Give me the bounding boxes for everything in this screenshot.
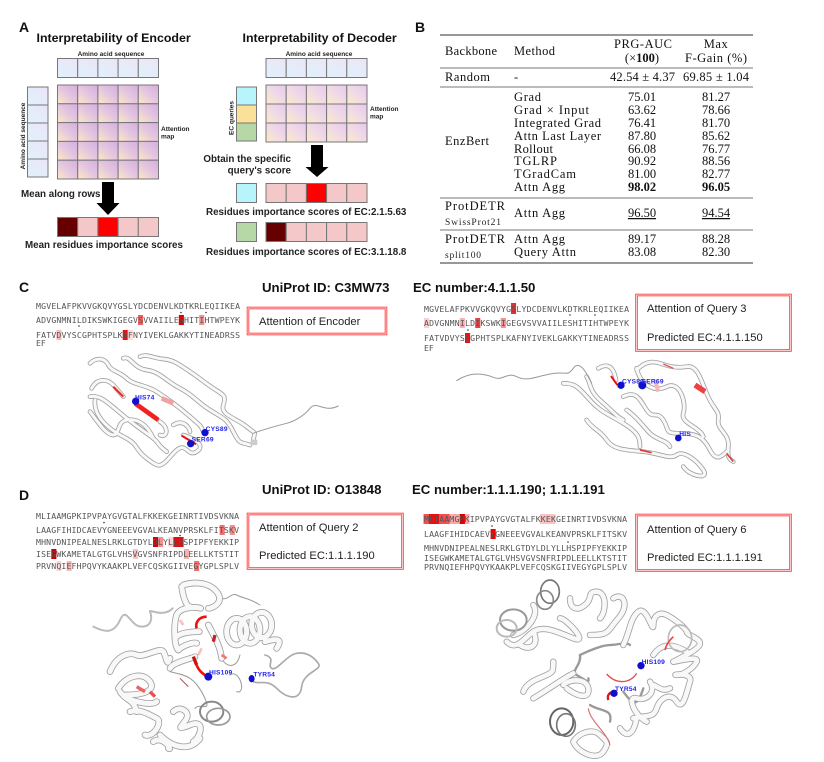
query swatch 2 (236, 222, 256, 242)
rows: EnzBert: TGradCam (514, 167, 576, 181)
protein structure: query 2 view: TYR54 (253, 672, 275, 679)
sequence: query 3 attention: ADVGNMNILDIKSWKIGEGVSVVAIILESHITIHTWPEYK (424, 318, 629, 328)
callout: attention of query 6: Predicted EC:1.1.1.191 (647, 552, 763, 564)
panel C: case study C3MW73 (19, 279, 790, 476)
callout: attention of query 2: Attention of Query 2 (259, 522, 359, 534)
protein structure: query 3 view (457, 362, 733, 476)
encoder sequence column (28, 87, 48, 177)
row: Random: 42.54 ± 4.37 (610, 70, 675, 84)
label: obtain specific query score: Obtain the specific (203, 154, 291, 165)
callout: attention of query 2 (248, 514, 402, 568)
encoder label: amino acid sequence top: Amino acid sequence (78, 51, 145, 58)
decoder label: EC queries: EC queries (228, 101, 236, 135)
row: ProtDETR SwissProt21: 96.50 (628, 206, 656, 220)
callout: attention of query 6 (636, 515, 790, 570)
sequence: encoder attention: FATVDVYSCGPHTSPLKAFNYIVEKLGAKKYTINEADRSS (36, 330, 240, 340)
panel A: interpretability diagrams (19, 19, 407, 258)
row: ProtDETR SwissProt21: Attn Agg (514, 206, 566, 220)
table header: (×100) (625, 51, 659, 65)
panel letter A: A (19, 19, 29, 35)
rows: EnzBert: EnzBert (445, 134, 490, 148)
rows: EnzBert: 66.08 (628, 142, 656, 156)
caption: mean residues importance: Mean residues importance scores (25, 240, 183, 251)
sequence: encoder attention: ADVGNMNILDIKSWKIGEGVSVVAIILESHITIHTWPEYK (36, 315, 240, 325)
rows: EnzBert: 78.66 (702, 103, 730, 117)
rows: EnzBert: 75.01 (628, 90, 656, 104)
decoder label: attention map: Attention (370, 106, 399, 113)
protein structure: query 3 view: SER69 (642, 378, 664, 385)
query swatch 1 (236, 184, 256, 202)
panel D: case study O13848 (19, 482, 790, 756)
decoder importance row EC 3.1.18.8 (266, 222, 367, 242)
caption: EC 3.1.18.8: Residues importance scores of EC:3.1.18.8 (206, 247, 407, 258)
protein structure: query 2 view: HIS109 (209, 669, 232, 676)
rows: EnzBert: Rollout (514, 142, 554, 156)
sequence: encoder attention: MGVELAFPKVVGKQVYGSLYDCDENVLKDTKRLEQIIKEA (36, 301, 240, 311)
protein structure: query 6 view: TYR54 (615, 686, 637, 693)
rows: EnzBert: TGLRP (514, 154, 557, 168)
rows: EnzBert: 81.27 (702, 90, 730, 104)
encoder label: attention map: Attention (161, 126, 190, 133)
protein structure: encoder view (90, 356, 338, 465)
rows: ProtDETR split100 (445, 232, 730, 261)
row: ProtDETR SwissProt21: ProtDETR (445, 199, 506, 213)
heading: EC numbers: EC number:1.1.1.190; 1.1.1.191 (412, 482, 605, 497)
sequence: query 3 attention: EF (424, 343, 434, 353)
sequence: query 2 attention: LAAGFIHIDCAEVYGNEEEVGVALKEANVPRSKLFITSKV (36, 525, 239, 535)
arrow: encoder mean (96, 182, 120, 215)
rows: EnzBert: 63.62 (628, 103, 656, 117)
protein structure: encoder view: HIS74 (135, 394, 155, 401)
encoder label: amino acid sequence side: Amino acid sequence (20, 102, 27, 169)
rows: EnzBert: Integrated Grad (514, 116, 602, 130)
rows: EnzBert: Attn Agg (514, 180, 566, 194)
rows: EnzBert: 87.80 (628, 129, 656, 143)
protein structure: query 3 view: CYS89 (622, 378, 644, 385)
sequence: query 3 attention: FATVDVYSCGPHTSPLKAFNYIVEKLGAKKYTINEADRSS (424, 333, 629, 343)
row: Random (445, 70, 750, 84)
rows: ProtDETR split100: Query Attn (514, 245, 577, 259)
sequence: query 3 attention (424, 303, 629, 353)
rows: ProtDETR split100: split100 (445, 251, 481, 261)
rows: EnzBert: 76.41 (628, 116, 656, 130)
table header (445, 37, 747, 65)
label: obtain specific query score: query's score (228, 166, 292, 176)
encoder label: attention map: map (161, 134, 174, 140)
sequence: query 2 attention (36, 511, 239, 571)
rows: EnzBert: 81.00 (628, 167, 656, 181)
panel letter C: C (19, 279, 29, 295)
rows: EnzBert: 98.02 (628, 180, 656, 194)
heading: encoder: Interpretability of Encoder (36, 31, 191, 45)
encoder attention map grid (58, 85, 158, 179)
callout: attention of query 6: Attention of Query 6 (647, 524, 747, 536)
callout: attention of encoder (248, 308, 386, 334)
table rules (440, 35, 753, 263)
row: Random: Random (445, 70, 490, 84)
callout: attention of encoder: Attention of Encoder (259, 316, 361, 328)
panel letter B: B (415, 19, 425, 35)
callout: attention of query 2: Predicted EC:1.1.1.190 (259, 550, 375, 562)
encoder sequence row (58, 58, 158, 78)
heading: UniProt ID O13848: UniProt ID: O13848 (262, 482, 381, 497)
decoder importance row EC 2.1.5.63 (266, 184, 367, 202)
rows: ProtDETR split100: 88.28 (702, 232, 730, 246)
callout: attention of query 3 (636, 295, 790, 350)
protein structure: query 2 view (93, 583, 319, 749)
protein structure: encoder view: CYS89 (206, 426, 228, 433)
table header: Max (704, 37, 728, 51)
panel letter D: D (19, 487, 29, 503)
sequence: query 6 attention: MHNVDNIPEALNESLRKLGTDYLDLYLLHSPIPFYEKKIP (424, 543, 627, 553)
row: ProtDETR SwissProt21 (445, 199, 731, 228)
decoder EC queries column (236, 87, 256, 141)
rows: EnzBert: 81.70 (702, 116, 730, 130)
rows: EnzBert: 88.56 (702, 154, 730, 168)
table header: Method (514, 44, 556, 58)
sequence: encoder attention: EF (36, 338, 46, 348)
rows: EnzBert: Grad (514, 90, 542, 104)
table header: F-Gain (%) (685, 51, 747, 65)
heading: decoder: Interpretability of Decoder (242, 31, 397, 45)
rows: ProtDETR split100: Attn Agg (514, 232, 566, 246)
rows: EnzBert (445, 90, 730, 194)
sequence: query 6 attention: ISEGWKAMETALGTGLVHSVGVSNFRIPDLEELLKTSTIT (424, 553, 627, 563)
rows: ProtDETR split100: ProtDETR (445, 232, 506, 246)
sequence: query 2 attention: ISEGWKAMETALGTGLVHSVGVSNFRIPDLEELLKTSTIT (36, 549, 239, 559)
rows: ProtDETR split100: 89.17 (628, 232, 656, 246)
table header: PRG-AUC (614, 37, 672, 51)
arrow: decoder query (306, 145, 328, 177)
sequence: query 6 attention: MLIAAMGPKIPVPAYGVGTALFKKEKGEINRTIVDSVKNA (424, 514, 627, 524)
protein structure: encoder view: SER69 (192, 437, 214, 444)
rows: EnzBert: Attn Last Layer (514, 129, 602, 143)
table header: Backbone (445, 44, 497, 58)
heading: EC number 4.1.1.50: EC number:4.1.1.50 (413, 280, 535, 295)
callout: attention of query 3: Predicted EC:4.1.1.150 (647, 332, 763, 344)
heading: UniProt ID C3MW73: UniProt ID: C3MW73 (262, 280, 389, 295)
sequence: query 2 attention: PRVNQIEFHPQVYKAAKPLVEFCQSKGIIVEGYGPLSPLV (36, 561, 239, 571)
decoder sequence row (266, 58, 367, 78)
sequence: query 2 attention: MHNVDNIPEALNESLRKLGTDYLDLYLLHSPIPFYEKKIP (36, 537, 239, 547)
rows: EnzBert: 76.77 (702, 142, 730, 156)
rows: EnzBert: 85.62 (702, 129, 730, 143)
decoder attention map grid (266, 85, 367, 142)
caption: EC 2.1.5.63: Residues importance scores of EC:2.1.5.63 (206, 207, 407, 218)
sequence: query 6 attention (424, 514, 627, 572)
row: Random: - (514, 70, 518, 84)
decoder label: amino acid sequence: Amino acid sequence (286, 51, 353, 58)
rows: EnzBert: 82.77 (702, 167, 730, 181)
label: mean along rows: Mean along rows (21, 189, 101, 200)
row: ProtDETR SwissProt21: SwissProt21 (445, 218, 501, 228)
callout: attention of query 3: Attention of Query 3 (647, 303, 747, 315)
row: ProtDETR SwissProt21: 94.54 (702, 206, 731, 220)
rows: EnzBert: 90.92 (628, 154, 656, 168)
encoder importance scores row (58, 218, 158, 236)
sequence: query 6 attention: PRVNQIEFHPQVYKAAKPLVEFCQSKGIIVEGYGPLSPLV (424, 562, 627, 572)
rows: EnzBert: 96.05 (702, 180, 730, 194)
protein structure: query 6 view: HIS109 (642, 659, 665, 666)
row: Random: 69.85 ± 1.04 (683, 70, 750, 84)
rows: ProtDETR split100: 83.08 (628, 245, 656, 259)
rows: EnzBert: Grad × Input (514, 103, 590, 117)
sequence: query 6 attention: LAAGFIHIDCAEVYGNEEEVGVALKEANVPRSKLFITSKV (424, 529, 627, 539)
panel B: results table (415, 19, 753, 263)
sequence: query 2 attention: MLIAAMGPKIPVPAYGVGTALFKKEKGEINRTIVDSVKNA (36, 511, 239, 521)
rows: ProtDETR split100: 82.30 (702, 245, 730, 259)
sequence: encoder attention (36, 301, 240, 348)
protein structure: query 6 view (497, 580, 700, 756)
sequence: query 3 attention: MGVELAFPKVVGKQVYGSLYDCDENVLKDTKRLEQIIKEA (424, 304, 629, 314)
protein structure: query 3 view: HIS (679, 431, 691, 438)
decoder label: attention map: map (370, 114, 383, 120)
